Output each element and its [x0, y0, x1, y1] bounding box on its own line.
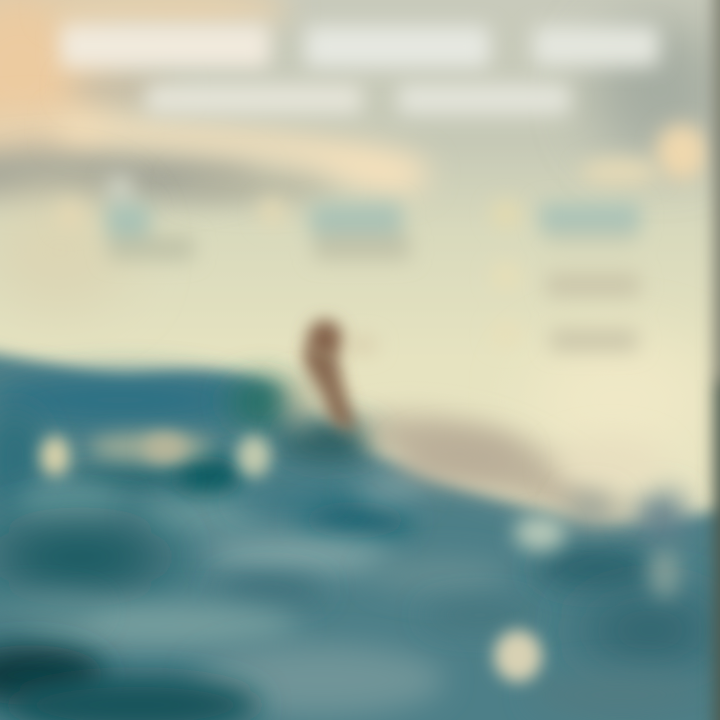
column 3 (blurred, illegible) [540, 203, 640, 351]
surfer silhouette [284, 320, 378, 429]
title (blurred, illegible) [60, 24, 659, 68]
subtitle (blurred, illegible) [146, 84, 570, 114]
ocean wave [0, 350, 720, 720]
wave foam spray [365, 416, 665, 524]
column 3 bullet markers [492, 201, 520, 346]
column 1 (blurred, illegible) [58, 176, 194, 260]
foam band and highlights on water [40, 434, 566, 682]
column 2 (blurred, illegible) [260, 198, 410, 260]
right edge strip [714, 0, 720, 720]
